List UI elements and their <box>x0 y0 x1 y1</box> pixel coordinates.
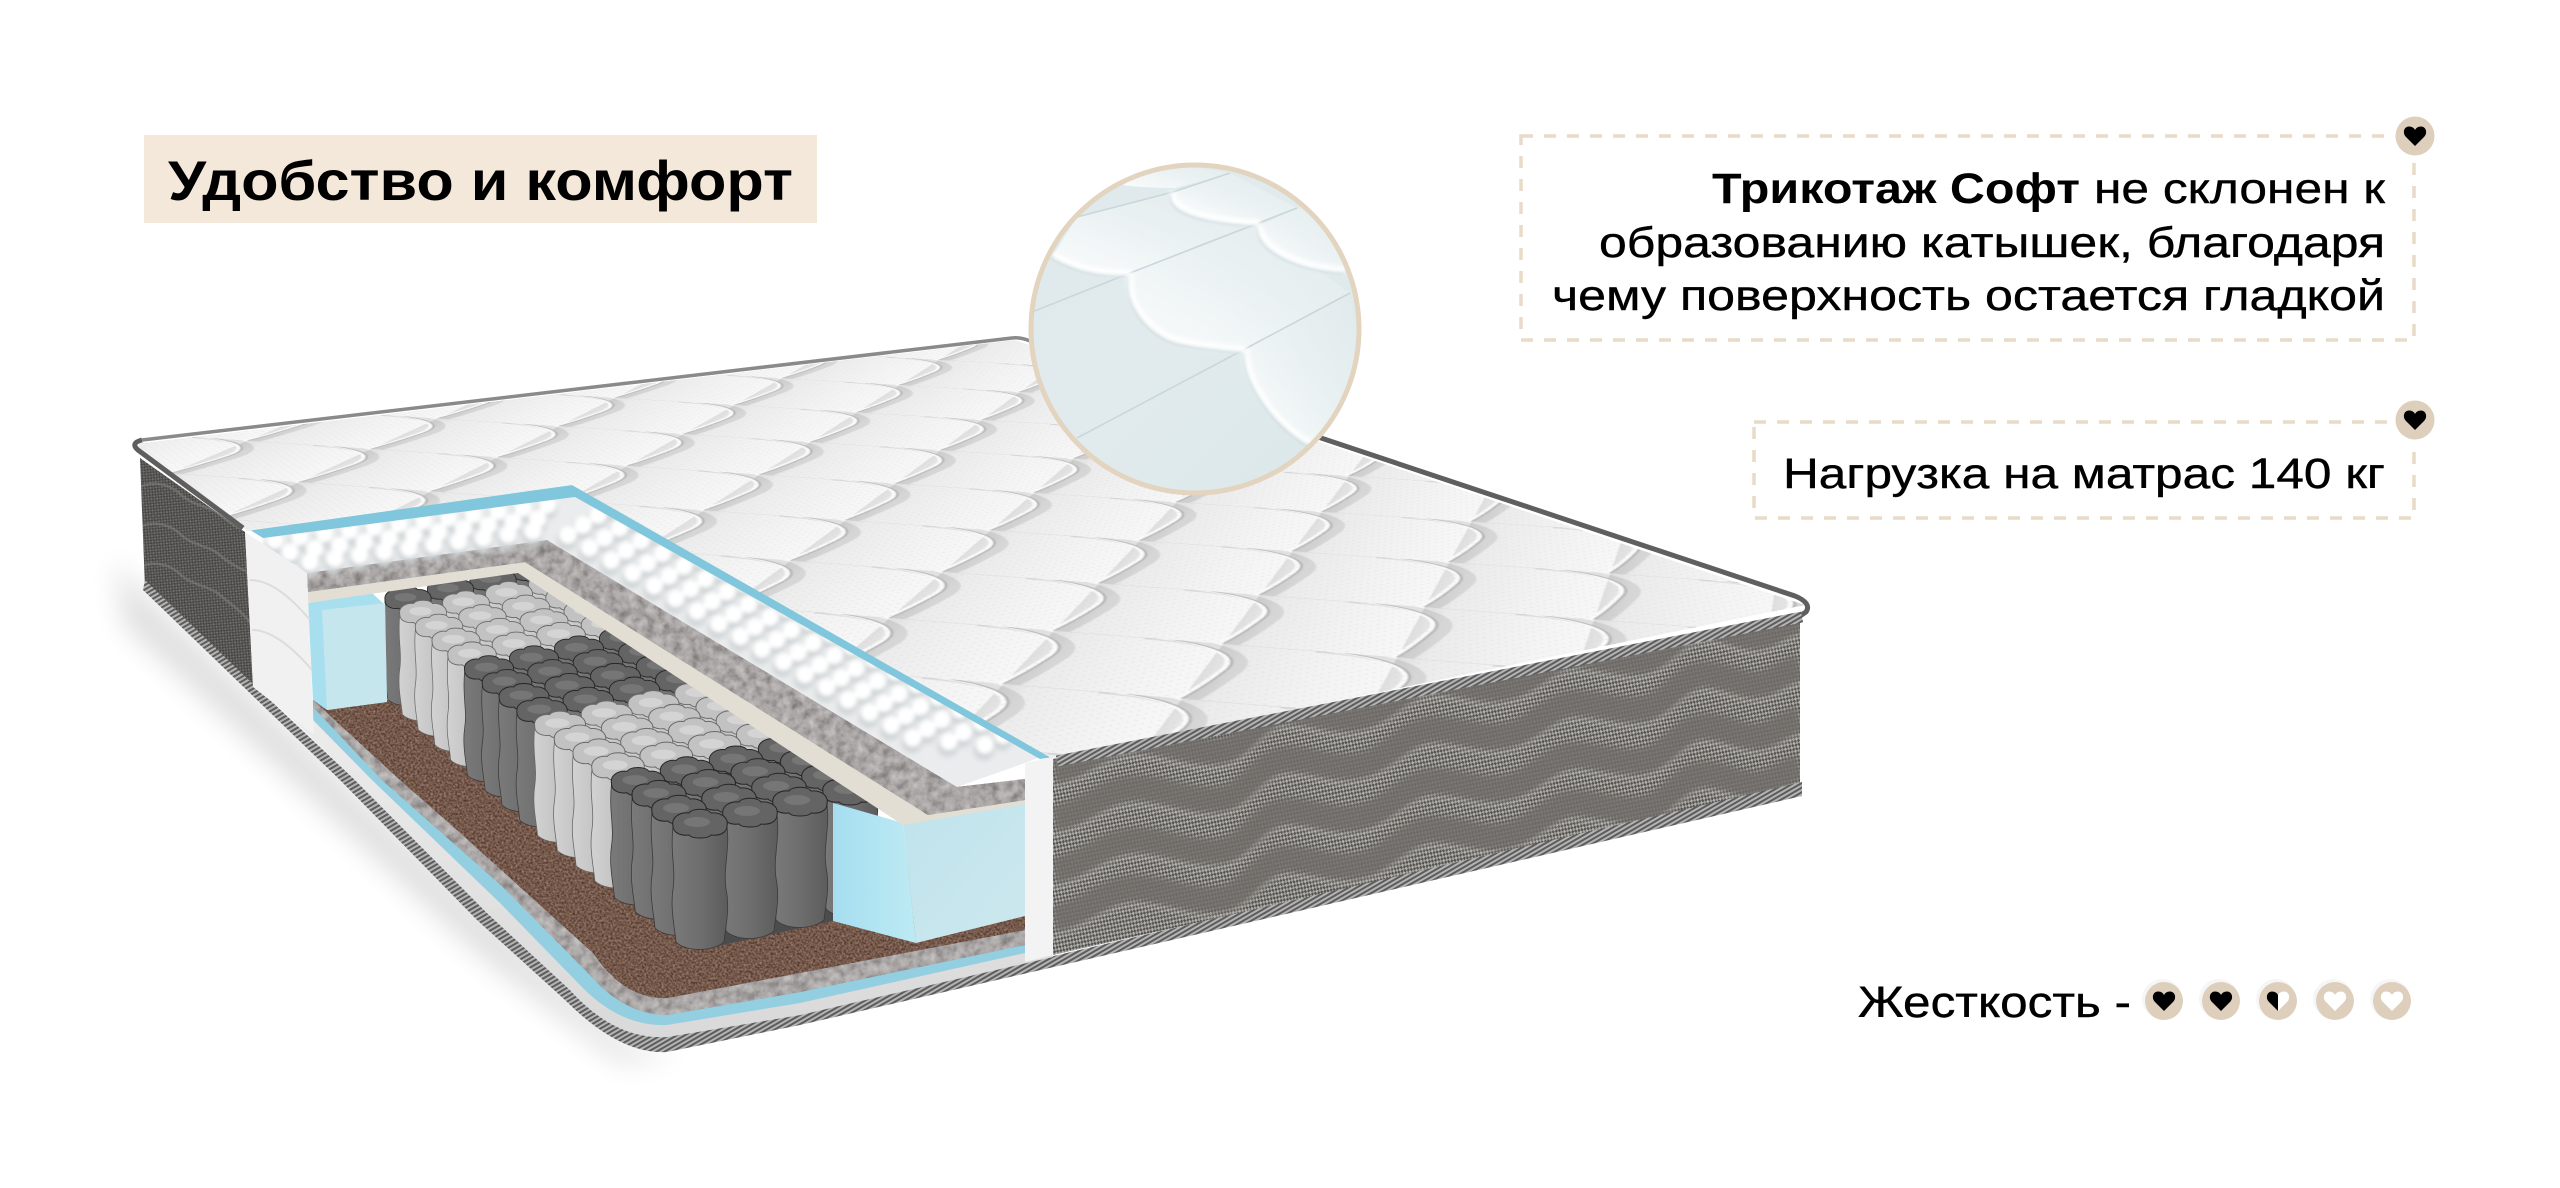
mattress body: sides, rim and cutaway layers <box>113 458 1802 1066</box>
firmness label: Жесткость - <box>1858 978 2131 1027</box>
lower felt layer <box>313 700 1025 1015</box>
bottom rim piping <box>143 580 1802 1052</box>
callout: fabric: образованию катышек, благодаря <box>1599 219 2385 267</box>
floor shadow <box>115 560 680 1062</box>
callout: fabric: Трикотаж Софт <box>1712 165 2080 213</box>
left side fabric <box>140 458 253 684</box>
title: Удобство и комфорт <box>168 149 793 212</box>
quilted top surface <box>138 340 1804 759</box>
felt layer upper <box>307 540 1025 815</box>
overlay: piping, loupe, text and ratings <box>132 116 2434 1020</box>
beige thin layer <box>308 562 1025 825</box>
callout: load <box>1754 422 2414 518</box>
egg-crate foam <box>263 497 1040 787</box>
left blue foam block <box>308 593 387 710</box>
callout: fabric <box>1521 136 2414 340</box>
spring cavity backing <box>385 573 860 950</box>
icon: heart badge fabric <box>2391 112 2439 160</box>
firmness rating hearts <box>2142 979 2411 1020</box>
callout: fabric: чему поверхность остается гладкой <box>1552 272 2385 320</box>
lower white quilt layer <box>253 681 1053 1037</box>
right blue foam block <box>833 800 1025 943</box>
white cut strip right <box>1025 757 1053 962</box>
icon: heart badge load <box>2391 396 2439 444</box>
front seam piping <box>1057 617 1802 761</box>
coir layer <box>313 700 1025 998</box>
top edge piping <box>135 338 1808 616</box>
callout: fabric: не склонен к <box>2094 165 2386 213</box>
white cut strip left <box>245 532 314 735</box>
title <box>144 135 817 223</box>
pocket spring unit <box>384 558 878 950</box>
right side fabric with quilted waves <box>1053 615 1800 955</box>
callout: load: Нагрузка на матрас 140 кг <box>1783 450 2385 498</box>
upper blue foam band <box>247 485 1053 759</box>
lower blue foam layer <box>313 700 1025 1025</box>
loupe: fabric close-up <box>1031 160 1370 493</box>
